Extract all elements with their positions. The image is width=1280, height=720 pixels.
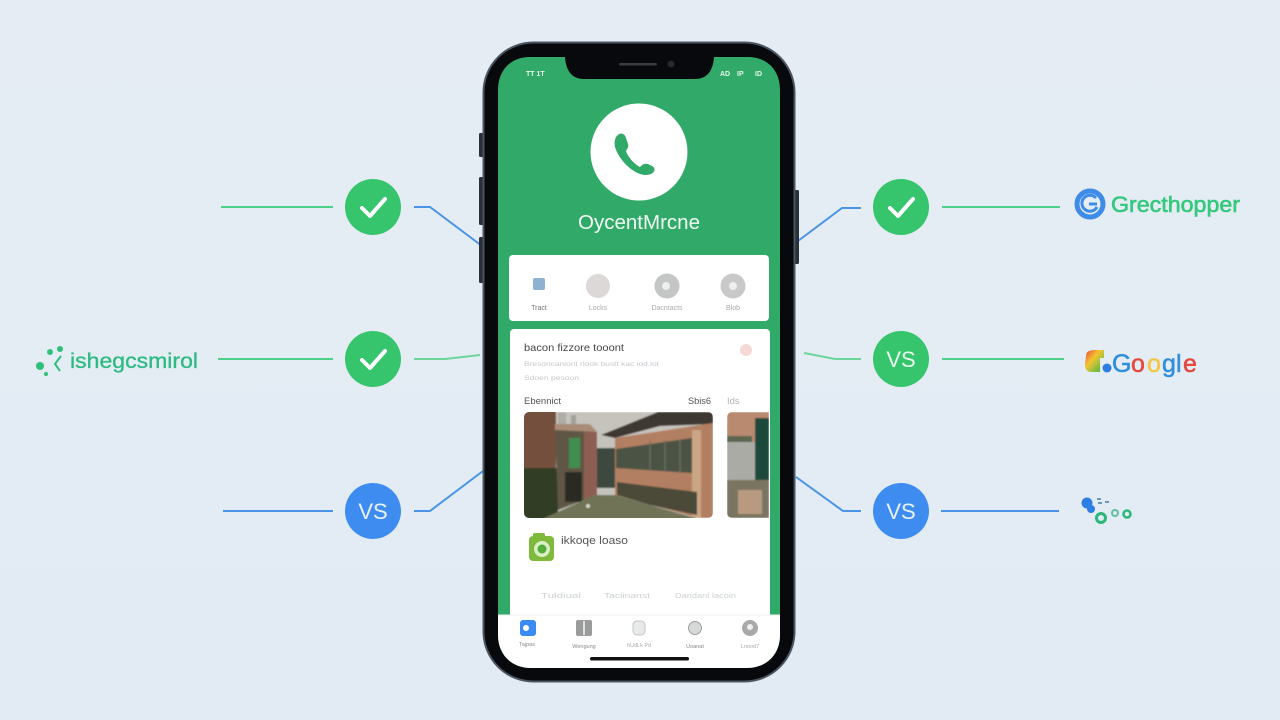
icon: left check 2: [345, 331, 401, 387]
notch details: [619, 60, 674, 68]
action 3: Dacntacts: [651, 305, 683, 312]
tab: messages: Wengung: [572, 644, 596, 650]
status bar: AD: [720, 71, 730, 78]
status bar: IP: [737, 71, 744, 78]
icon: right VS badge green: [873, 331, 929, 387]
app name: ikkoqe loaso: [561, 535, 628, 547]
photo: building: [520, 410, 713, 520]
phone body: [484, 42, 794, 682]
card description: [524, 361, 659, 382]
icon: right VS badge blue: VS: [886, 499, 916, 524]
connector: left row 3: [223, 471, 483, 511]
logo: Google: [1085, 350, 1197, 378]
logo: Google: o: [1131, 350, 1145, 378]
photo: second building: [727, 412, 769, 518]
call icon: [590, 104, 688, 200]
tab: contacts: Uoanat: [686, 644, 704, 650]
section labels: Ebennict: [524, 396, 561, 407]
icon: right VS badge green: VS: [886, 347, 916, 372]
logo: Grecthopper: Grecthopper: [1111, 192, 1240, 217]
status bar: ID: [755, 71, 762, 78]
card badge: [740, 344, 752, 356]
section labels: Sbis6: [688, 396, 711, 407]
home indicator: [590, 657, 689, 660]
tab: history: hUdLk Pd: [627, 643, 651, 649]
card description: Bresoncaniont rlook bustt kac iod.lot: [524, 361, 659, 368]
footer labels: Tuldiual: [541, 593, 582, 600]
logo: Google: g: [1162, 350, 1176, 378]
panel: quick actions: [509, 255, 769, 321]
action 3: [651, 274, 683, 312]
connector: left row 1: [221, 207, 482, 246]
icon: left VS badge: VS: [358, 499, 388, 524]
icon: app logo: [529, 533, 554, 561]
phone side buttons: [479, 133, 799, 283]
tab: settings: [741, 620, 759, 650]
logo: left brand: [36, 346, 198, 376]
icon: right VS badge blue: [873, 483, 929, 539]
icon: left check 1: [345, 179, 401, 235]
connector: right row 1: [798, 207, 1060, 241]
logo: Google: l: [1176, 350, 1182, 378]
phone: [484, 42, 794, 682]
action 2: Locks: [589, 305, 608, 312]
connector: left row 2: [218, 355, 480, 359]
connector: right row 3: [796, 477, 1059, 511]
status bar: TT 1T: [526, 71, 545, 78]
app title: OycentMrcne: [578, 212, 700, 234]
tab: settings: Lnood7: [741, 644, 759, 650]
icon: right check: [873, 179, 929, 235]
action 1: [531, 278, 547, 312]
connector: right row 2: [804, 353, 1064, 359]
tab: contacts: [686, 622, 704, 650]
phone screen: [498, 57, 780, 668]
action 2: [586, 274, 610, 312]
tab: home: [519, 620, 536, 648]
logo: Google: G: [1112, 350, 1131, 378]
tab bar: [498, 615, 780, 668]
status bar: [526, 71, 762, 76]
action 1: Tract: [531, 305, 547, 312]
footer labels: Dandanl lacoin: [675, 593, 736, 600]
action 4: [720, 274, 746, 312]
card description: Sdoen pesoon: [524, 375, 579, 382]
logo: Google: o: [1147, 350, 1161, 378]
tab: history: [627, 621, 651, 649]
card heading: bacon fizzore tooont: [524, 342, 624, 354]
section labels: [524, 398, 740, 404]
logo: small brand mark: [1082, 498, 1130, 522]
tab: home: Tajpas: [519, 642, 535, 648]
footer labels: [541, 592, 736, 598]
logo: Google: e: [1183, 350, 1197, 378]
footer labels: Taclinanst: [604, 593, 650, 600]
section labels: Ids: [727, 396, 740, 407]
logo: left brand: ishegcsmirol: [70, 350, 198, 373]
icon: left VS badge: [345, 483, 401, 539]
tab: messages: [572, 620, 596, 650]
action 4: Blob: [726, 305, 740, 312]
panel: content card: [510, 329, 770, 629]
